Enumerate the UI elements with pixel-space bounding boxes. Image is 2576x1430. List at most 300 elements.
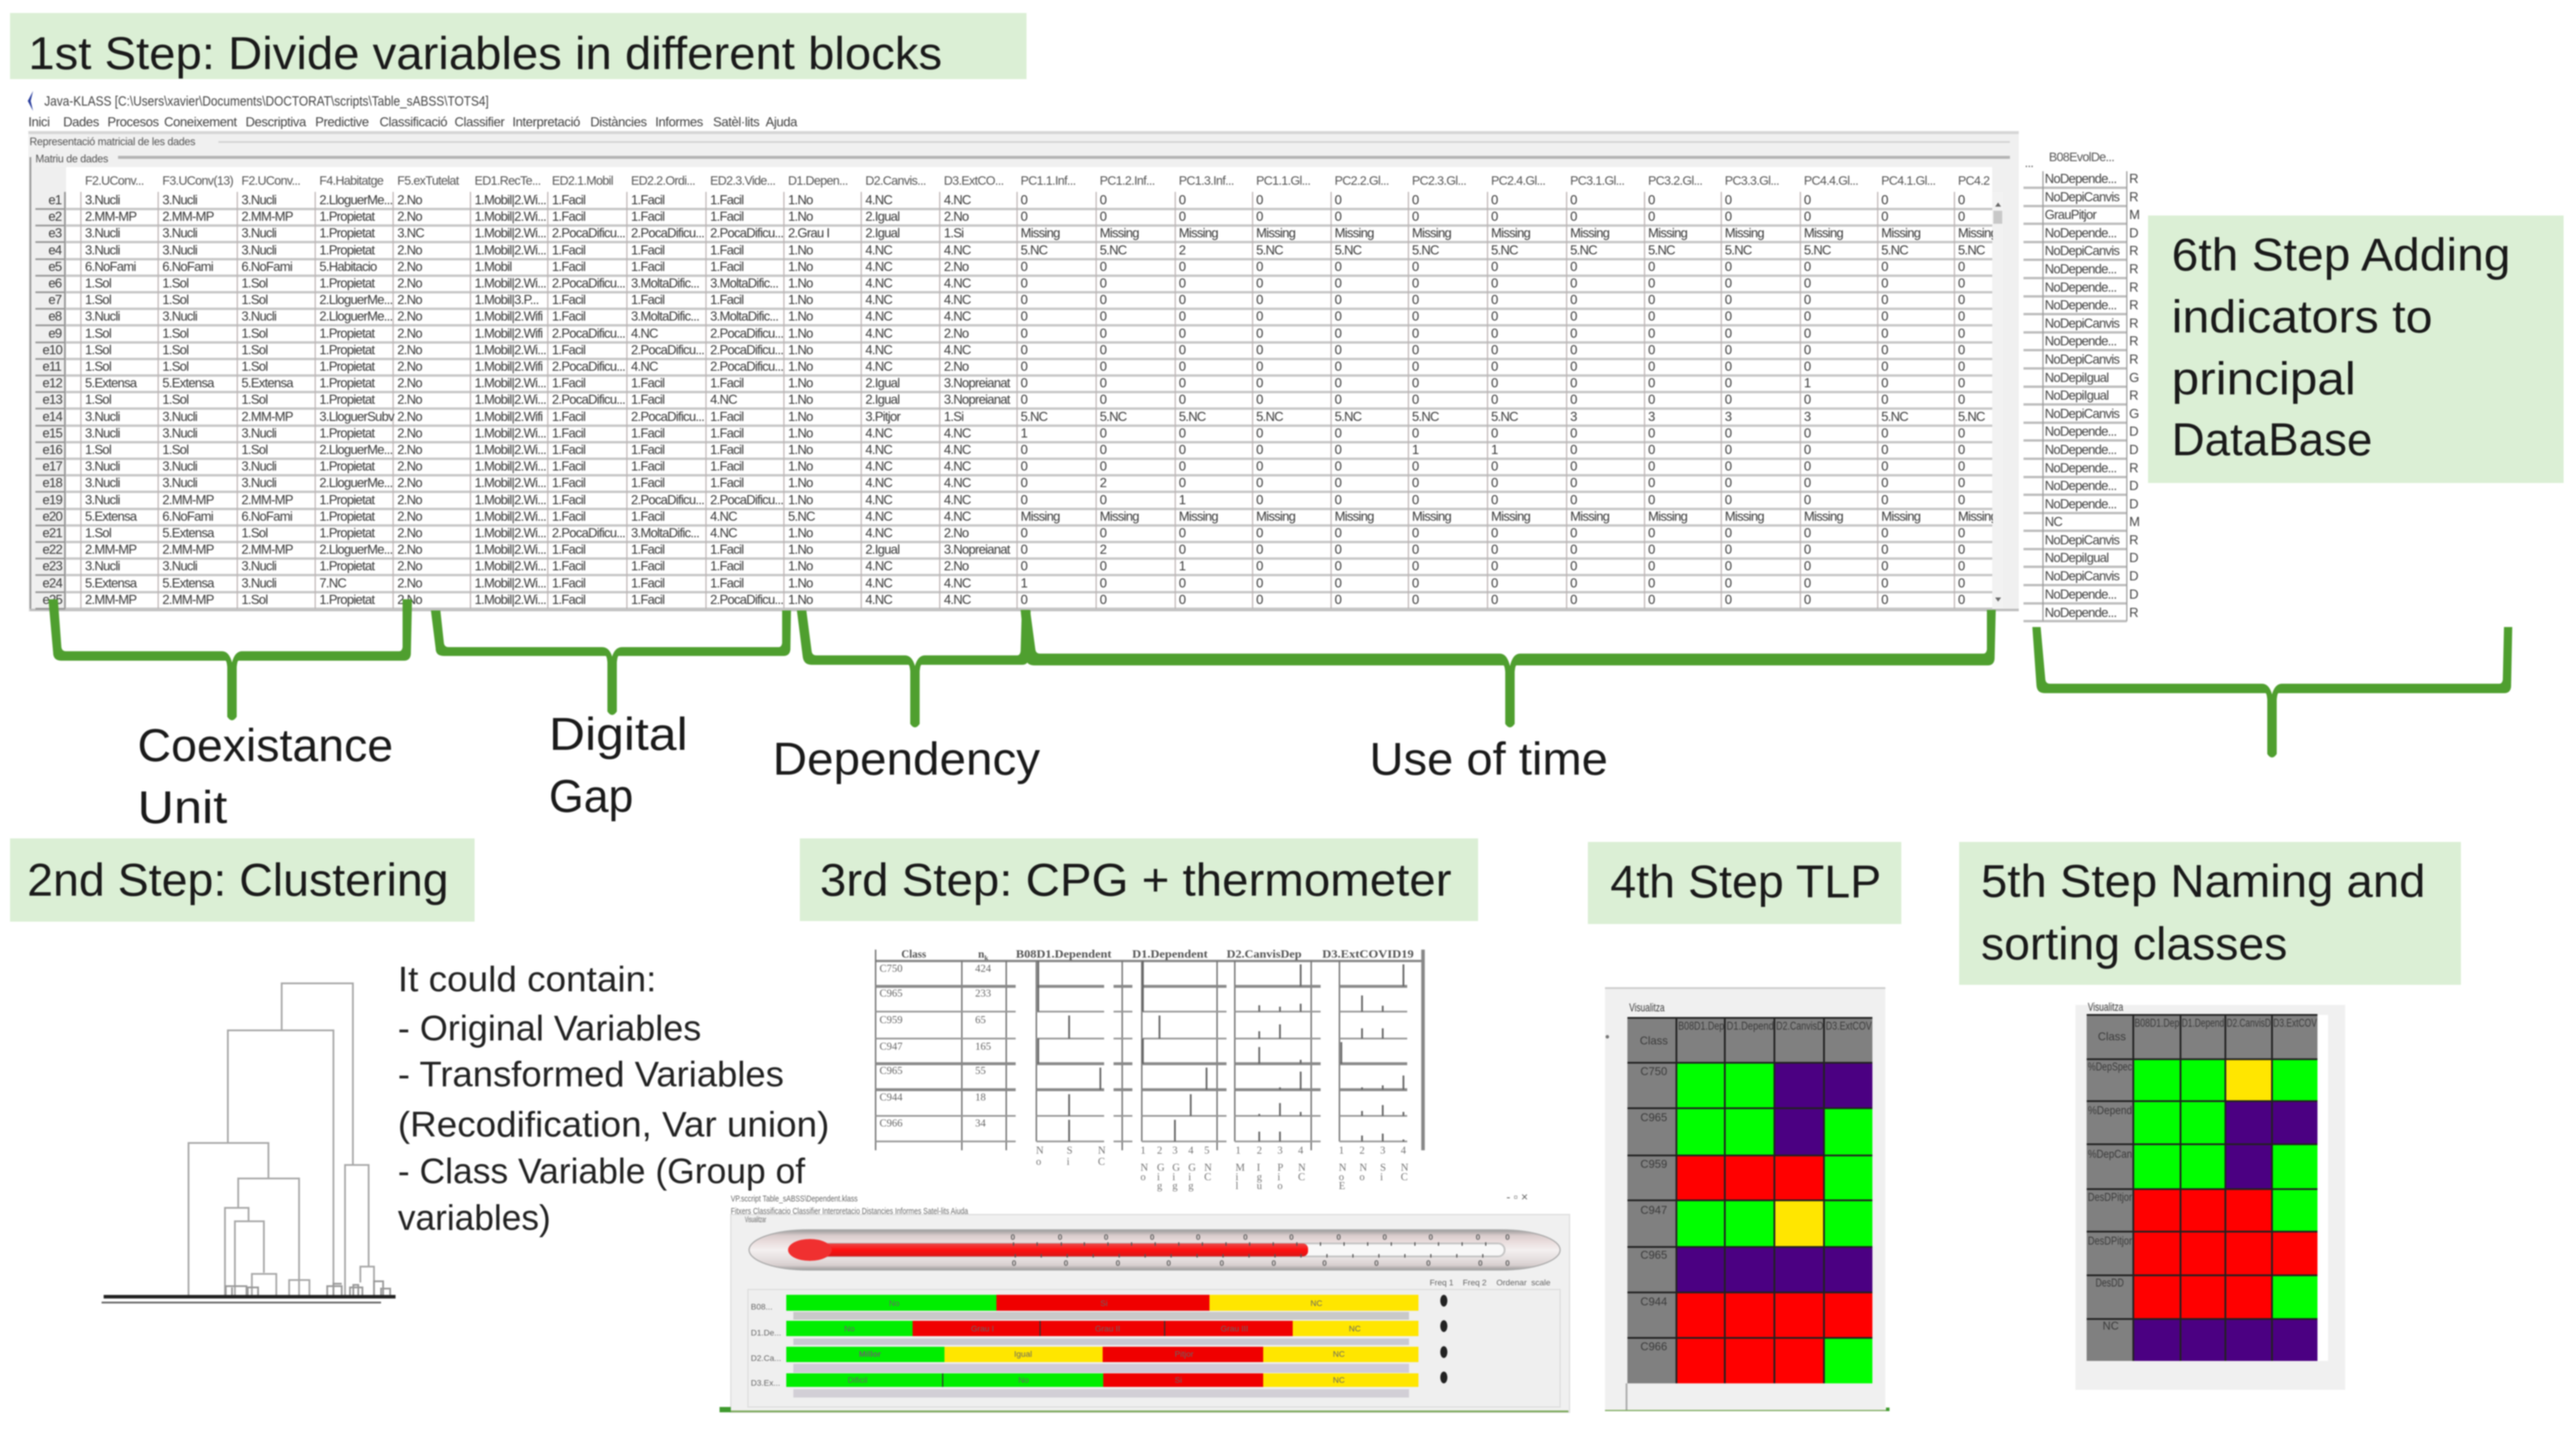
- label: digital gap: [549, 708, 688, 822]
- table data rows: 1.Facil: [631, 259, 665, 274]
- table header row: ED1.RecTe...: [475, 174, 541, 188]
- table data rows: 1.Facil: [631, 509, 665, 524]
- table data rows: 1.Sol: [241, 342, 267, 357]
- table data rows: Missing: [1725, 509, 1764, 524]
- table data rows: Missing: [1725, 226, 1764, 240]
- table data rows: 5.NC: [1100, 409, 1127, 424]
- table data rows: e22: [43, 542, 63, 557]
- table data rows: 5.NC: [1881, 409, 1909, 424]
- table data rows: 0000000000000: [1021, 359, 1965, 374]
- table data rows: Missing: [1100, 226, 1139, 240]
- table data rows: 3.Nucli: [241, 309, 276, 324]
- table data rows: 1.Mobil|2.Wi...: [475, 192, 546, 207]
- heading: 1st step: [10, 13, 1027, 79]
- text block: what the clustering could contain: (Recodification, Var union): [398, 1105, 829, 1144]
- table data rows: 3.Nucli: [85, 226, 120, 240]
- table data rows: 1.Facil: [552, 559, 586, 573]
- table data rows: 3.Nucli: [241, 576, 276, 590]
- named TLP labels: %Depend: [2088, 1105, 2132, 1117]
- table data rows: 1.Facil: [631, 209, 665, 224]
- table header row: PC2.4.Gl...: [1491, 174, 1545, 188]
- table data rows: e3: [48, 226, 62, 240]
- table data rows: 5.NC: [1256, 243, 1284, 257]
- stacked bar: D3: D3.Ex...: [751, 1378, 780, 1387]
- table data rows: 2.PocaDificu...: [710, 226, 783, 240]
- CPG row labels: 65: [975, 1014, 986, 1026]
- table data rows: 3: [1648, 409, 1655, 424]
- CPG column headers: B08D1.Dependent: [1016, 948, 1112, 961]
- named TLP labels: DesDPitjor: [2088, 1191, 2133, 1204]
- table data rows: 1.Sol: [162, 292, 188, 307]
- table data rows: e4: [48, 243, 62, 257]
- named TLP labels: %DepSpec: [2088, 1061, 2132, 1073]
- named TLP labels: D2.CanvisD: [2227, 1017, 2271, 1030]
- TLP labels: D2.CanvisD: [1776, 1020, 1823, 1033]
- table data rows: 2.PocaDificu...: [552, 359, 625, 374]
- table data rows: 2.No: [944, 209, 969, 224]
- table data rows: 2.MM-MP: [162, 592, 214, 607]
- panel: indicators column added to the database: NoDepende...: [2045, 442, 2116, 457]
- window title and menu: - ▫ ×: [1506, 1191, 1528, 1204]
- table data rows: Missing: [1179, 226, 1218, 240]
- named TLP labels: [2088, 1017, 2317, 1333]
- table data rows: 1.Facil: [552, 209, 586, 224]
- table data rows: 1.Facil: [631, 576, 665, 590]
- table data rows: 2.PocaDificu...: [631, 226, 704, 240]
- table header row: PC1.1.Inf...: [1021, 174, 1075, 188]
- table data rows: 4.NC: [631, 359, 659, 374]
- table data rows: e24: [43, 576, 63, 590]
- table data rows: 1.Facil: [552, 475, 586, 490]
- table data rows: e14: [43, 409, 63, 424]
- table data rows: 6.NoFami: [85, 259, 136, 274]
- table data rows: 3.Nucli: [85, 309, 120, 324]
- table data rows: 0000011000000: [1021, 442, 1965, 457]
- table data rows: 3.Nucli: [85, 559, 120, 573]
- table data rows: e9: [48, 326, 62, 341]
- table data rows: 5.NC: [1256, 409, 1284, 424]
- label: dependency: Dependency: [773, 733, 1040, 785]
- table data rows: 1.Sol: [162, 326, 188, 341]
- panel: thermometer window: [720, 1191, 1570, 1412]
- table data rows: Missing: [1648, 226, 1687, 240]
- table data rows: 1.Facil: [631, 542, 665, 557]
- table header row: ED2.1.Mobil: [552, 174, 613, 188]
- table data rows: 1.No: [788, 259, 813, 274]
- table data rows: 5.NC: [1412, 243, 1440, 257]
- table data rows: 2.PocaDificu...: [631, 409, 704, 424]
- table data rows: 1.No: [788, 475, 813, 490]
- table data rows: 2.LloguerMe...: [319, 292, 393, 307]
- table data rows: 0000000000000: [1021, 459, 1965, 474]
- stacked bar: D3: NC: [1333, 1375, 1345, 1385]
- table data rows: 0000000000000: [1021, 276, 1965, 290]
- table data rows: Missing: [1256, 509, 1295, 524]
- table data rows: 0010000000000: [1021, 492, 1965, 507]
- CPG column headers: D1.Dependent: [1132, 948, 1208, 961]
- table data rows: 6.NoFami: [162, 509, 213, 524]
- table header row: ED2.3.Vide...: [710, 174, 775, 188]
- table data rows: 5.NC: [1648, 243, 1676, 257]
- menu bar: Ajuda: [766, 115, 798, 129]
- table header row: F5.exTutelat: [397, 174, 459, 188]
- table data rows: 1.Mobil|2.Wi...: [475, 276, 546, 290]
- table data rows: 2.No: [944, 326, 969, 341]
- table data rows: 1.Facil: [552, 492, 586, 507]
- table data rows: Missing: [1021, 226, 1060, 240]
- table data rows: 7.NC: [319, 576, 347, 590]
- table data rows: 5.Extensa: [162, 376, 215, 390]
- panel: traffic light panel named classes 5th step: Visualitza: [2088, 1001, 2123, 1014]
- heading: 5th step: 5th Step Naming and: [1981, 855, 2425, 907]
- panel: indicators column added to the database: NoDepende...: [2045, 424, 2116, 439]
- table data rows: Missing: [1412, 509, 1451, 524]
- table data rows: 4.NC: [865, 276, 893, 290]
- table data rows: 1.No: [788, 359, 813, 374]
- menu bar: Interpretació: [512, 115, 580, 129]
- table data rows: 1.Propietat: [319, 276, 375, 290]
- table data rows: 4.NC: [631, 326, 659, 341]
- stacked bar: B08: Si: [1100, 1298, 1107, 1308]
- table data rows: 3.MoltaDific...: [631, 525, 699, 540]
- table data rows: 1.Facil: [631, 442, 665, 457]
- CPG row labels: C750: [880, 962, 903, 974]
- table data rows: 4.NC: [865, 342, 893, 357]
- table data rows: 2.Igual: [865, 392, 900, 407]
- table data rows: 2.No: [397, 459, 423, 474]
- named TLP labels: %DepCan: [2088, 1148, 2132, 1161]
- TLP labels: C965: [1640, 1249, 1667, 1262]
- table data rows: 0000000000000: [1021, 192, 1965, 207]
- table header row: PC3.3.Gl...: [1725, 174, 1779, 188]
- stacked bar: D2: Millor: [859, 1349, 881, 1359]
- table data rows: 1.Sol: [85, 326, 111, 341]
- table header row: PC3.2.Gl...: [1648, 174, 1702, 188]
- panel: traffic light panel named classes 5th step: [2075, 1001, 2345, 1390]
- window frame: Matriu de dades: [35, 153, 108, 165]
- table data rows: 0000000000000: [1021, 292, 1965, 307]
- table data rows: 3.Nucli: [241, 243, 276, 257]
- table data rows: 1.Mobil|2.Wi...: [475, 342, 546, 357]
- table data rows: e5: [48, 259, 62, 274]
- label: coexistance unit: Unit: [138, 781, 227, 833]
- CPG axis category labels: [1036, 1144, 1408, 1191]
- table data rows: 4.NC: [865, 492, 893, 507]
- table data rows: 1.Propietat: [319, 492, 375, 507]
- table data rows: 5.NC: [1021, 409, 1048, 424]
- table header row: PC3.1.Gl...: [1570, 174, 1624, 188]
- menu bar: Procesos: [107, 115, 159, 129]
- table data rows: 4.NC: [944, 592, 972, 607]
- table data rows: 1.Facil: [631, 392, 665, 407]
- table data rows: 3.Nucli: [241, 459, 276, 474]
- table data rows: Missing: [1335, 509, 1374, 524]
- table data rows: 2.PocaDificu...: [552, 525, 625, 540]
- table data rows: 2.PocaDificu...: [552, 326, 625, 341]
- table data rows: 1.Facil: [631, 592, 665, 607]
- table data rows: 2.PocaDificu...: [552, 226, 625, 240]
- text block: what the clustering could contain: It could contain:: [398, 959, 656, 999]
- table data rows: 0000000000000: [1021, 525, 1965, 540]
- table data rows: 2.No: [397, 359, 423, 374]
- table data rows: 5.NC: [1100, 243, 1127, 257]
- table data rows: 1.Mobil|2.Wi...: [475, 492, 546, 507]
- table header row: PC2.2.Gl...: [1335, 174, 1389, 188]
- table data rows: 4.NC: [865, 459, 893, 474]
- table data rows: 3.Nucli: [162, 559, 197, 573]
- table data rows: 1.Sol: [162, 359, 188, 374]
- table data rows: 5.NC: [1335, 243, 1362, 257]
- table data rows: 1.Facil: [710, 559, 744, 573]
- table data rows: Missing: [1256, 226, 1295, 240]
- table data rows: 1.Facil: [631, 376, 665, 390]
- table data rows: 4.NC: [865, 509, 893, 524]
- table data rows: 5.Habitacio: [319, 259, 377, 274]
- table data rows: 4.NC: [865, 259, 893, 274]
- stacked bar: D2: NC: [1333, 1349, 1345, 1359]
- table data rows: Missing: [1412, 226, 1451, 240]
- table header row: D1.Depen...: [788, 174, 848, 188]
- table data rows: 4.NC: [710, 392, 738, 407]
- table data rows: 2.No: [944, 259, 969, 274]
- stacked bar: D3: [751, 1373, 1418, 1398]
- table data rows: 1.Facil: [552, 192, 586, 207]
- table data rows: 1.Mobil|2.Wi...: [475, 209, 546, 224]
- stacked bar: B08: [751, 1295, 1418, 1320]
- table data rows: 1.Propietat: [319, 342, 375, 357]
- table data rows: 4.NC: [944, 192, 972, 207]
- TLP labels: C966: [1640, 1341, 1667, 1353]
- table data rows: 2.No: [397, 442, 423, 457]
- table data rows: 1.Sol: [162, 342, 188, 357]
- table data rows: 1.Mobil|2.Wi...: [475, 426, 546, 440]
- table data rows: 4.NC: [865, 592, 893, 607]
- panel: indicators column added to the database: NoDepende...: [2045, 280, 2116, 295]
- table data rows: 1.Facil: [710, 442, 744, 457]
- table data rows: 3.Nucli: [162, 309, 197, 324]
- table data rows: 4.NC: [865, 309, 893, 324]
- CPG column headers: k: [985, 954, 989, 962]
- table data rows: 1.Facil: [710, 576, 744, 590]
- CPG row labels: C959: [880, 1014, 903, 1026]
- table data rows: 1.Facil: [631, 292, 665, 307]
- menu bar: Inici: [28, 115, 50, 129]
- menu bar: Classificació: [380, 115, 447, 129]
- bracket: use of time: [1021, 610, 1996, 727]
- table data rows: 1.Sol: [241, 392, 267, 407]
- table data rows: 3.MoltaDific...: [631, 276, 699, 290]
- CPG row labels: 233: [975, 987, 991, 999]
- table data rows: 1.Facil: [552, 509, 586, 524]
- stacked bar: D2: Igual: [1014, 1349, 1032, 1359]
- table data rows: 0000000000000: [1021, 326, 1965, 341]
- table data rows: e11: [43, 359, 61, 374]
- chart: dendrogram: [102, 984, 395, 1302]
- table data rows: 1.Mobil|2.Wi...: [475, 525, 546, 540]
- heading: 6th step: DataBase: [2172, 413, 2372, 465]
- table data rows: 3.Nucli: [162, 475, 197, 490]
- menu bar: Distàncies: [590, 115, 647, 129]
- table data rows: 0000000000000: [1021, 392, 1965, 407]
- table header row: D2.Canvis...: [865, 174, 926, 188]
- stacked bar: D2: D2.Ca...: [751, 1353, 781, 1363]
- table data rows: 2.LloguerMe...: [319, 192, 393, 207]
- table data rows: Missing: [1100, 509, 1139, 524]
- table data rows: 1.Facil: [552, 426, 586, 440]
- table data rows: 1.Facil: [552, 342, 586, 357]
- table data rows: 2.No: [944, 359, 969, 374]
- panel: traffic light panel (TLP) 4th step: [1605, 987, 1889, 1411]
- table data rows: 5.NC: [1335, 409, 1362, 424]
- table data rows: 2.LloguerMe...: [319, 475, 393, 490]
- panel: indicators column added to the database: NoDepiCanvis: [2045, 316, 2120, 331]
- panel: indicators column added to the database: NoDepiCanvis: [2045, 352, 2120, 367]
- table data rows: 3.Nopreianat: [944, 376, 1011, 390]
- table data rows: 1.Propietat: [319, 209, 375, 224]
- table data rows: 3.Nucli: [241, 475, 276, 490]
- table data rows: 2.MM-MP: [85, 209, 136, 224]
- CPG grid and spikes: [875, 949, 1423, 1150]
- text block: what the clustering could contain: - Transformed Variables: [398, 1054, 784, 1094]
- table data rows: 4.NC: [710, 525, 738, 540]
- table data rows: 1.No: [788, 559, 813, 573]
- table grid: [35, 192, 1992, 609]
- table data rows: 1.No: [788, 392, 813, 407]
- table data rows: e18: [43, 475, 63, 490]
- table data rows: 5.Extensa: [85, 376, 138, 390]
- table data rows: 3: [1570, 409, 1577, 424]
- table data rows: 1.No: [788, 209, 813, 224]
- TLP labels: Class: [1640, 1035, 1668, 1047]
- table data rows: 1.No: [788, 292, 813, 307]
- table data rows: 1.Sol: [241, 292, 267, 307]
- TLP labels: D3.ExtCOV: [1826, 1020, 1872, 1033]
- panel: indicators column added to the database: NoDepiCanvis: [2045, 190, 2120, 204]
- stacked bar: B08: NC: [1310, 1298, 1322, 1308]
- CPG axis category labels: NSN: [1036, 1144, 1106, 1156]
- table data rows: e8: [48, 309, 62, 324]
- legend labels: [1430, 1278, 1551, 1287]
- heading: 6th step: 6th Step Adding: [2172, 228, 2510, 280]
- named TLP labels: NC: [2103, 1320, 2119, 1333]
- table data rows: 1.Facil: [552, 409, 586, 424]
- table header row: PC1.1.Gl...: [1256, 174, 1310, 188]
- table data rows: 2.No: [397, 209, 423, 224]
- stacked bar: D1: D1.De...: [751, 1328, 781, 1337]
- table data rows: 3: [1725, 409, 1732, 424]
- table data rows: 1.Propietat: [319, 326, 375, 341]
- table data rows: 1.Facil: [631, 192, 665, 207]
- table data rows: 1.Facil: [552, 542, 586, 557]
- table data rows: 1.Propietat: [319, 592, 375, 607]
- table data rows: 3: [1804, 409, 1811, 424]
- thermometer: 000000000000: [1011, 1232, 1510, 1242]
- label: digital gap: Digital: [549, 708, 688, 760]
- table data rows: 0000000000000: [1021, 342, 1965, 357]
- CPG row labels: C966: [880, 1117, 903, 1129]
- heading: 6th step: principal: [2172, 352, 2356, 404]
- table header row: PC2.3.Gl...: [1412, 174, 1466, 188]
- table header row: ED2.2.Ordi...: [631, 174, 695, 188]
- table data rows: 3.Nucli: [162, 226, 197, 240]
- panel: indicators column added to the database: NoDepende...: [2045, 478, 2116, 493]
- CPG axis category labels: gggluoE: [1157, 1180, 1345, 1191]
- table data rows: 5.NC: [1958, 243, 1986, 257]
- table data rows: 1.Si: [944, 409, 963, 424]
- table data rows: 1.Mobil|2.Wi...: [475, 559, 546, 573]
- table data rows: Missing: [1648, 509, 1687, 524]
- table data rows: 2.Igual: [865, 542, 900, 557]
- table data rows: 1.Facil: [552, 592, 586, 607]
- table data rows: Missing: [1958, 226, 1997, 240]
- text block: what the clustering could contain: - Class Variable (Group of: [398, 1151, 805, 1191]
- panel: indicators column added to the database: NoDepende...: [2045, 605, 2116, 620]
- table data rows: 2.No: [397, 592, 423, 607]
- table data rows: 6.NoFami: [241, 509, 292, 524]
- table data rows: 4.NC: [944, 292, 972, 307]
- chart: class panel graph (CPG): [875, 948, 1423, 1191]
- table data rows: 3.Nucli: [162, 459, 197, 474]
- table data rows: 1.No: [788, 492, 813, 507]
- table data rows: 2.Grau I: [788, 226, 829, 240]
- table data rows: 2.MM-MP: [241, 409, 293, 424]
- table data rows: 2.No: [397, 309, 423, 324]
- stacked bar: D3: Dificil: [848, 1375, 867, 1385]
- table data rows: e25: [43, 592, 63, 607]
- table data rows: 2.LloguerMe...: [319, 309, 393, 324]
- table header row: F3.UConv(13): [162, 174, 233, 188]
- table data rows: 1.Mobil|2.Wi...: [475, 509, 546, 524]
- table data rows: 2.MM-MP: [162, 209, 214, 224]
- CPG column headers: n: [978, 948, 985, 961]
- table data rows: 3.MoltaDific...: [710, 309, 778, 324]
- table data rows: 4.NC: [865, 359, 893, 374]
- table data rows: 3.Nucli: [241, 559, 276, 573]
- bracket: coexistance unit: [48, 599, 412, 720]
- table data rows: 1.Facil: [710, 475, 744, 490]
- menu bar: Dades: [63, 115, 99, 129]
- table data rows: 1.Mobil: [475, 259, 512, 274]
- table data rows: 2.PocaDificu...: [710, 359, 783, 374]
- table data rows: 1.Facil: [710, 426, 744, 440]
- table data rows: 2.No: [397, 276, 423, 290]
- table data rows: 3.Nucli: [85, 459, 120, 474]
- table data rows: 1.Sol: [162, 442, 188, 457]
- table data rows: 3.Nucli: [85, 426, 120, 440]
- CPG row labels: C965: [880, 1065, 903, 1076]
- table data rows: e17: [43, 459, 63, 474]
- table data rows: 5.NC: [1881, 243, 1909, 257]
- table data rows: 4.NC: [865, 576, 893, 590]
- table data rows: 1.Propietat: [319, 509, 375, 524]
- table data rows: 5.NC: [1021, 243, 1048, 257]
- stacked bar: D3: No: [1018, 1375, 1029, 1385]
- menu bar: Descriptiva: [246, 115, 307, 129]
- table data rows: e16: [43, 442, 63, 457]
- table header row: PC1.2.Inf...: [1100, 174, 1155, 188]
- table data rows: 5.Extensa: [241, 376, 294, 390]
- table data rows: 6.NoFami: [241, 259, 292, 274]
- table data rows: 1.No: [788, 326, 813, 341]
- table data rows: 3.Nucli: [85, 492, 120, 507]
- panel: indicators column added to the database: NoDepende...: [2045, 587, 2116, 602]
- named TLP labels: B08D1.Dep: [2134, 1017, 2179, 1030]
- table data rows: 2.PocaDificu...: [710, 492, 783, 507]
- table data rows: 2.LloguerMe...: [319, 542, 393, 557]
- stacked bar: D1: Grau III: [1221, 1324, 1248, 1333]
- table data rows: 1.Sol: [162, 276, 188, 290]
- named TLP labels: DesDD: [2096, 1277, 2124, 1289]
